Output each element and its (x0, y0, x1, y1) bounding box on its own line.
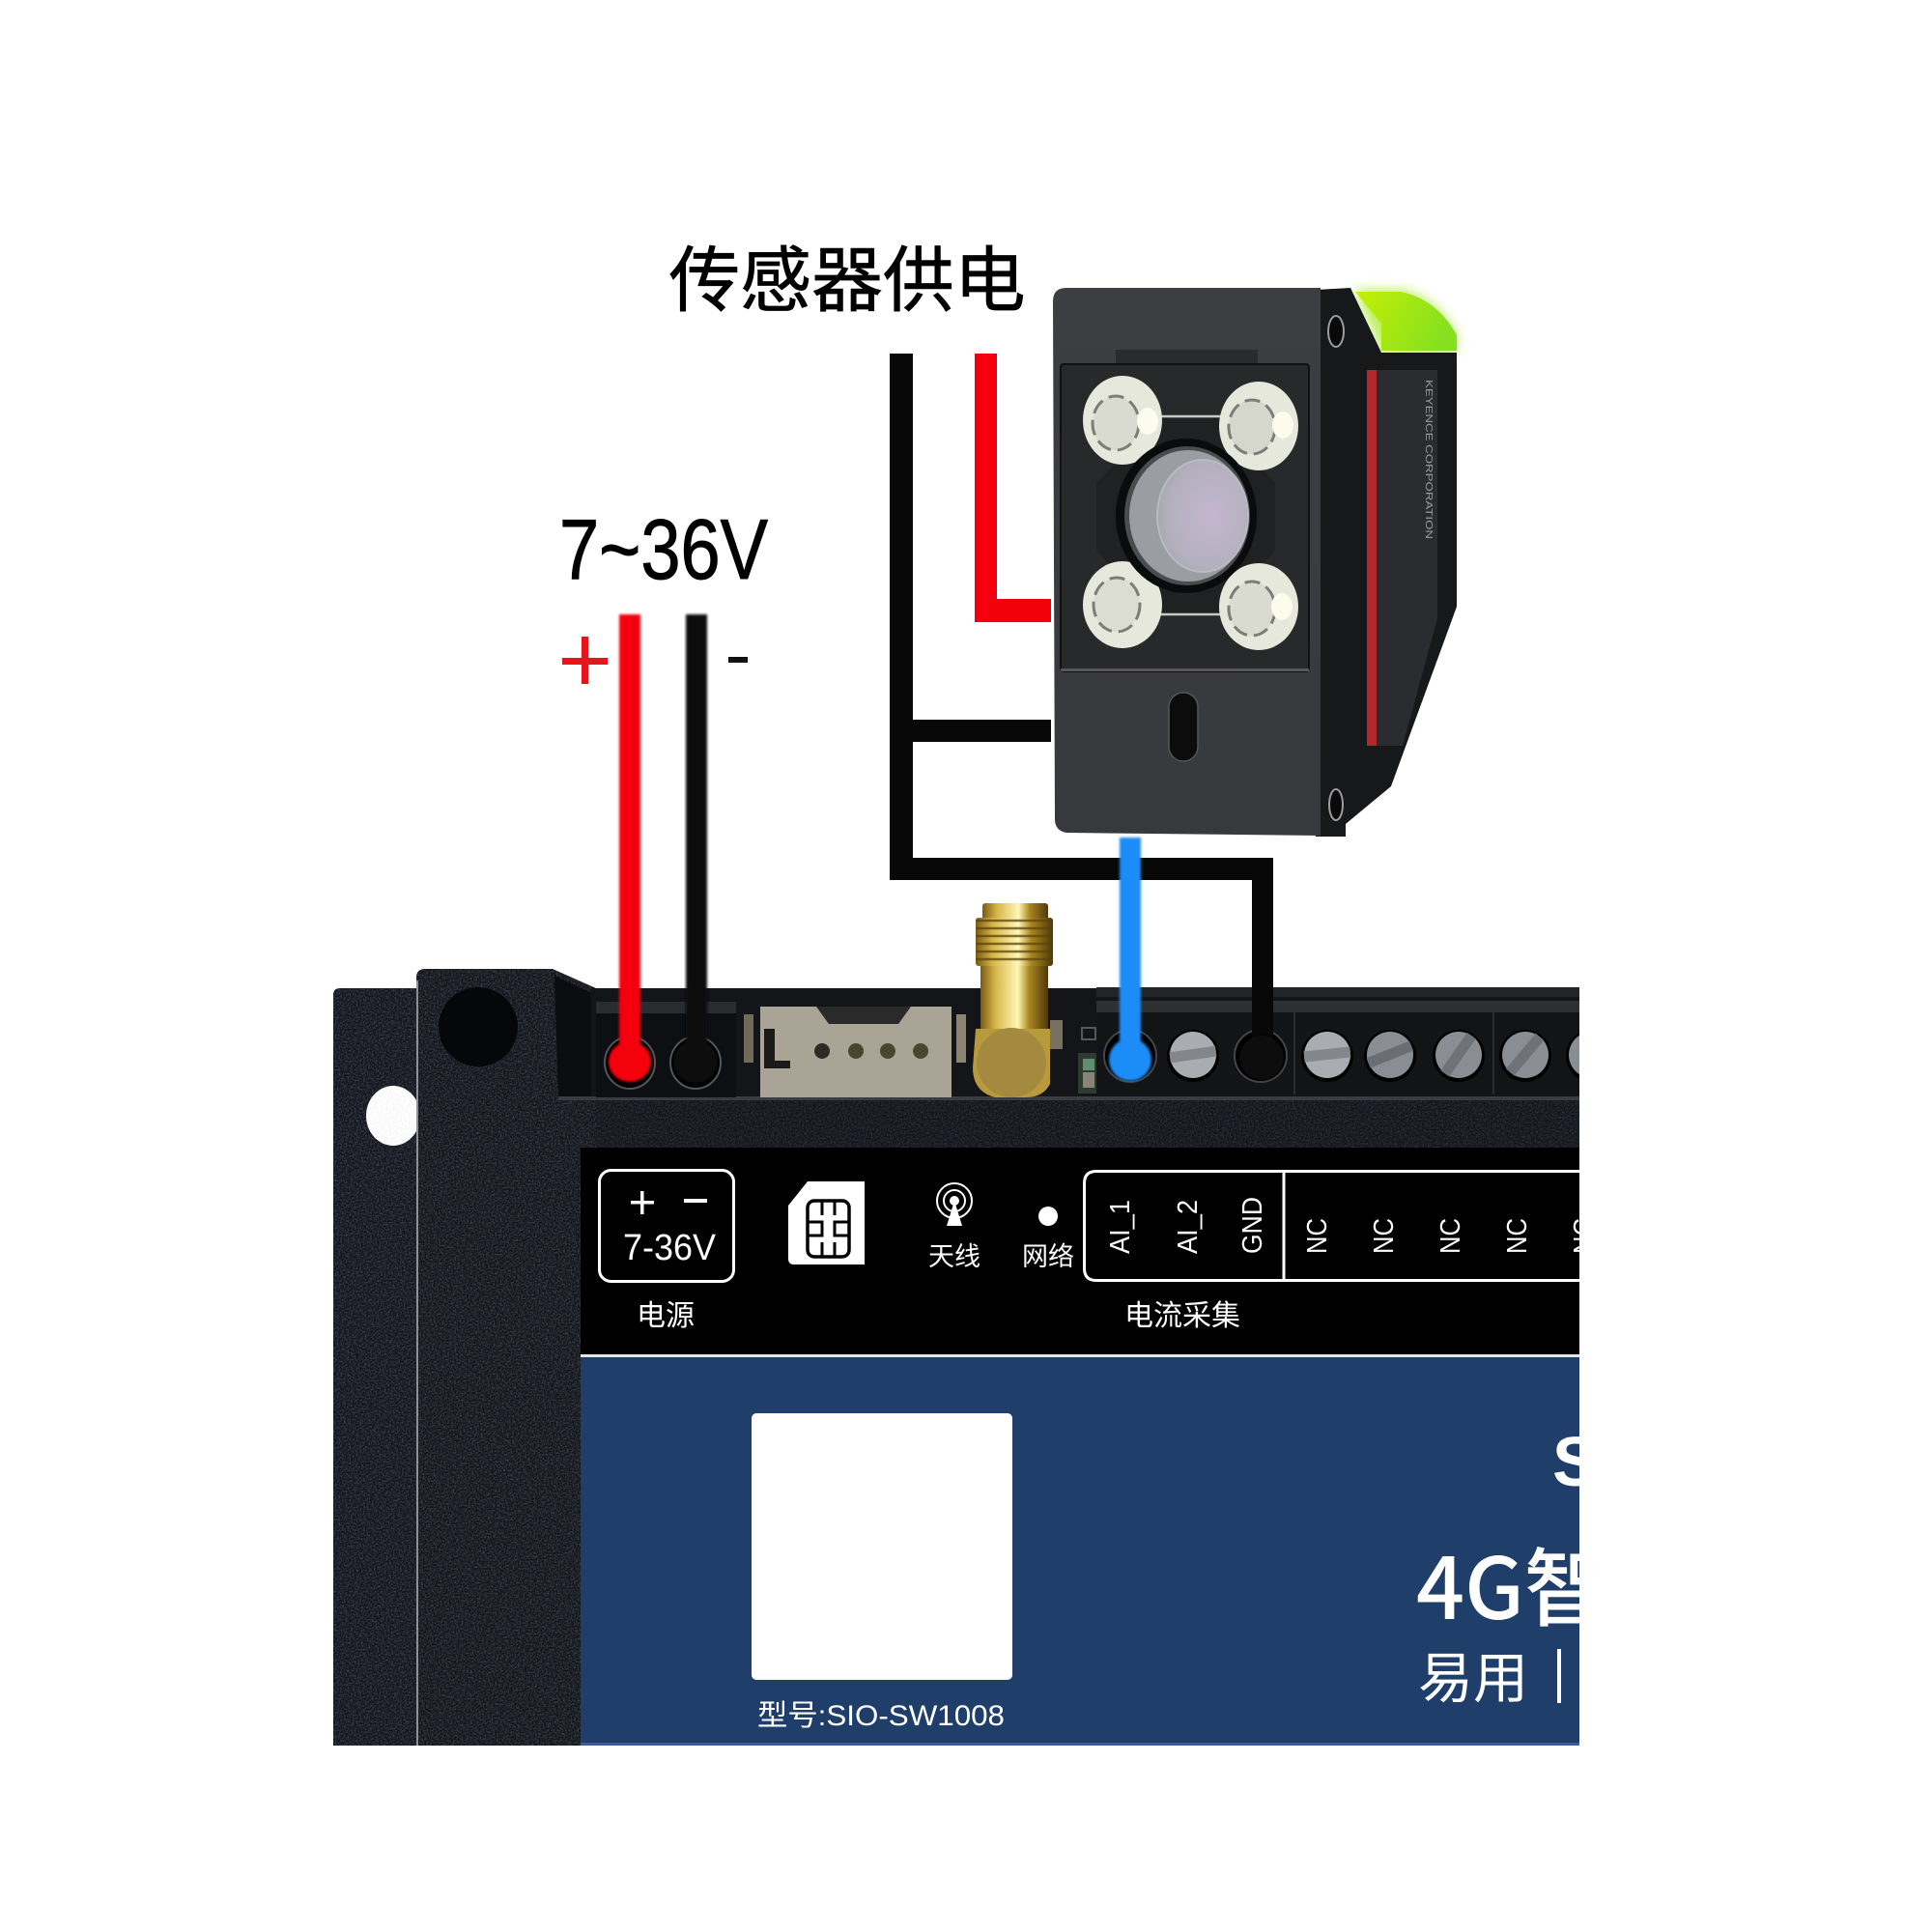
lens (1116, 439, 1257, 593)
sensor side label panel (1368, 370, 1437, 746)
label strip (581, 1148, 1585, 1354)
nameplate bottom edge (581, 1743, 1585, 1746)
LED bottom left (1083, 561, 1162, 648)
slogan separator (1557, 1649, 1561, 1703)
wire: supply negative black (673, 614, 718, 1083)
label: NC 4: NC (1502, 1218, 1533, 1254)
inner body plate (416, 969, 1584, 1746)
screw 7 (1499, 1030, 1551, 1082)
bracket edge highlight (416, 980, 418, 1746)
heading: sensor power: 传感器供电 (668, 223, 1026, 327)
heading: voltage 7~36V: 7~36V (559, 501, 768, 597)
white QR placeholder (752, 1413, 1012, 1680)
icon: antenna (937, 1183, 972, 1226)
icon: minus sign (728, 657, 748, 663)
icon: SIM card (788, 1181, 865, 1264)
screw 2 (1167, 1030, 1219, 1082)
network indicator dot (1038, 1207, 1058, 1226)
LED top right (1219, 382, 1298, 470)
recess lower edge (558, 1096, 1584, 1100)
screw 5 (1364, 1030, 1416, 1082)
mounting hole in bracket (366, 1086, 420, 1146)
sensor front face (1053, 288, 1321, 836)
sensor panel bottom highlight (1061, 668, 1309, 671)
device: controller body (333, 903, 1694, 1746)
sensor green top glow (1354, 290, 1457, 353)
label: NC 3: NC (1435, 1218, 1466, 1254)
body mounting hole (439, 987, 518, 1066)
label: GND: GND (1237, 1197, 1268, 1254)
wire: sensor power red (975, 354, 1051, 622)
sensor side brand text: KEYENCE CORPORATION (1423, 380, 1434, 539)
body shoulder wedge (554, 976, 591, 1096)
SIM card slot (744, 1007, 966, 1097)
SMA antenna connector (973, 903, 1063, 1097)
label: AI_1: AI_1 (1105, 1200, 1136, 1254)
wire: ground terminal blob (1239, 1036, 1284, 1080)
LED top left (1083, 376, 1162, 465)
screw 6 (1433, 1030, 1485, 1082)
cropped product title: 4G智能 (1416, 1521, 1694, 1644)
label: antenna: 天线 (928, 1236, 980, 1273)
label: current acquisition: 电流采集 (1124, 1292, 1240, 1334)
screw 4 (1301, 1030, 1353, 1082)
sensor top tab (1116, 350, 1258, 365)
divider under label strip (581, 1354, 1585, 1357)
screw 8 (1566, 1034, 1579, 1078)
power label box (599, 1171, 734, 1281)
terminal label box (1084, 1171, 1600, 1281)
sensor (1053, 288, 1457, 837)
model number: 型号:SIO-SW1008 (757, 1700, 1005, 1732)
wire: signal blue (1109, 838, 1151, 1081)
wire: sensor black with branches (890, 354, 1273, 1053)
top recess for connectors (591, 988, 596, 995)
sensor green cap (1355, 292, 1457, 351)
icon: plus sign (562, 637, 608, 684)
wire: supply positive red (609, 614, 651, 1082)
LED bottom right (1219, 563, 1298, 650)
terminal block: power (596, 1002, 736, 1097)
sensor side body (1316, 288, 1457, 837)
label: power: 电源 (637, 1292, 695, 1334)
sensor red stripe (1367, 370, 1377, 746)
cropped product slogan: 易用 (1418, 1634, 1528, 1714)
LED connector lines (1159, 416, 1222, 614)
outer mounting bracket (333, 988, 425, 1746)
status LED (1078, 1028, 1097, 1094)
label: AI_2: AI_2 (1173, 1200, 1204, 1254)
sensor inner panel (1061, 364, 1309, 671)
cropped brand name: SIO (1552, 1424, 1672, 1501)
blue nameplate (581, 1357, 1585, 1746)
lens housing (1096, 418, 1275, 614)
label: NC 2: NC (1369, 1218, 1400, 1254)
wiring diagram (333, 244, 1579, 1746)
body lip texture (596, 1097, 1584, 1150)
power label box: 7-36V (623, 1228, 717, 1268)
label: network: 网络 (1022, 1236, 1074, 1273)
body texture (333, 969, 596, 1746)
label: NC 1: NC (1302, 1218, 1333, 1254)
mounting slot (1169, 693, 1198, 761)
sensor screws (1328, 316, 1344, 820)
terminal block: current inputs (1096, 987, 1618, 1094)
label: NC 5: NC (1569, 1218, 1600, 1254)
